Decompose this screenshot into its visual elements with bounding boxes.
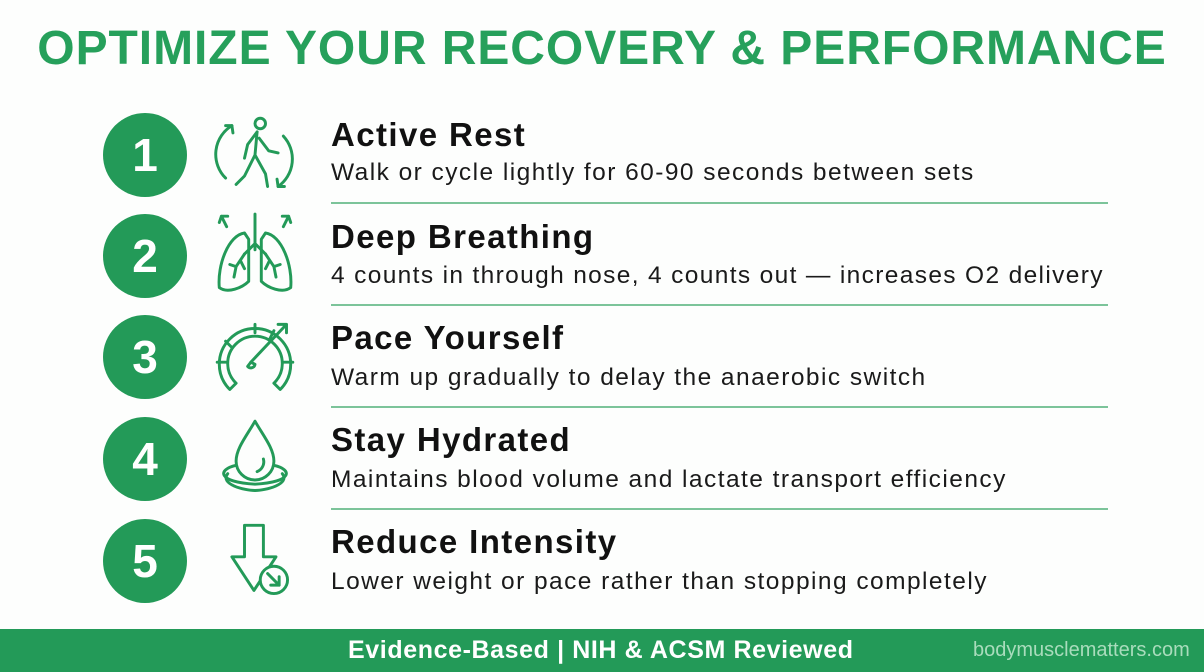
heading: Stay Hydrated bbox=[331, 421, 571, 458]
footer bar bbox=[0, 629, 1204, 672]
number badge 3: 3 bbox=[132, 331, 158, 383]
description: Warm up gradually to delay the anaerobic switch bbox=[331, 364, 927, 391]
number badge 2 bbox=[103, 214, 187, 298]
icon: walking person with cycle arrows bbox=[214, 116, 294, 188]
number badge 2: 2 bbox=[132, 230, 158, 282]
row 2: deep breathing bbox=[103, 212, 1108, 306]
description: Walk or cycle lightly for 60-90 seconds between sets bbox=[331, 159, 975, 186]
heading: Deep Breathing bbox=[331, 218, 594, 255]
number badge 1 bbox=[103, 113, 187, 197]
icon: speedometer bbox=[216, 322, 294, 391]
number badge 4 bbox=[103, 417, 187, 501]
number badge 4: 4 bbox=[132, 433, 158, 485]
number badge 5 bbox=[103, 519, 187, 603]
number badge 1: 1 bbox=[132, 129, 158, 181]
number badge 3 bbox=[103, 315, 187, 399]
number badge 5: 5 bbox=[132, 535, 158, 587]
row 5: reduce intensity bbox=[103, 519, 988, 603]
row 1: active rest bbox=[103, 113, 1108, 204]
heading: Pace Yourself bbox=[331, 319, 564, 356]
row 3: pace yourself bbox=[103, 315, 1108, 408]
description: 4 counts in through nose, 4 counts out — increases O2 delivery bbox=[331, 262, 1104, 289]
footer tagline: Evidence-Based | NIH & ACSM Reviewed bbox=[348, 636, 854, 664]
title: OPTIMIZE YOUR RECOVERY & PERFORMANCE bbox=[37, 22, 1167, 75]
description: Lower weight or pace rather than stopping completely bbox=[331, 568, 988, 595]
website: bodymusclematters.com bbox=[973, 639, 1190, 661]
icon: lungs bbox=[218, 212, 292, 292]
icon: water drop bbox=[222, 420, 288, 492]
heading: Reduce Intensity bbox=[331, 523, 617, 560]
row 4: stay hydrated bbox=[103, 417, 1108, 510]
icon: down arrow bbox=[230, 524, 289, 595]
description: Maintains blood volume and lactate transport efficiency bbox=[331, 466, 1007, 493]
heading: Active Rest bbox=[331, 116, 526, 153]
